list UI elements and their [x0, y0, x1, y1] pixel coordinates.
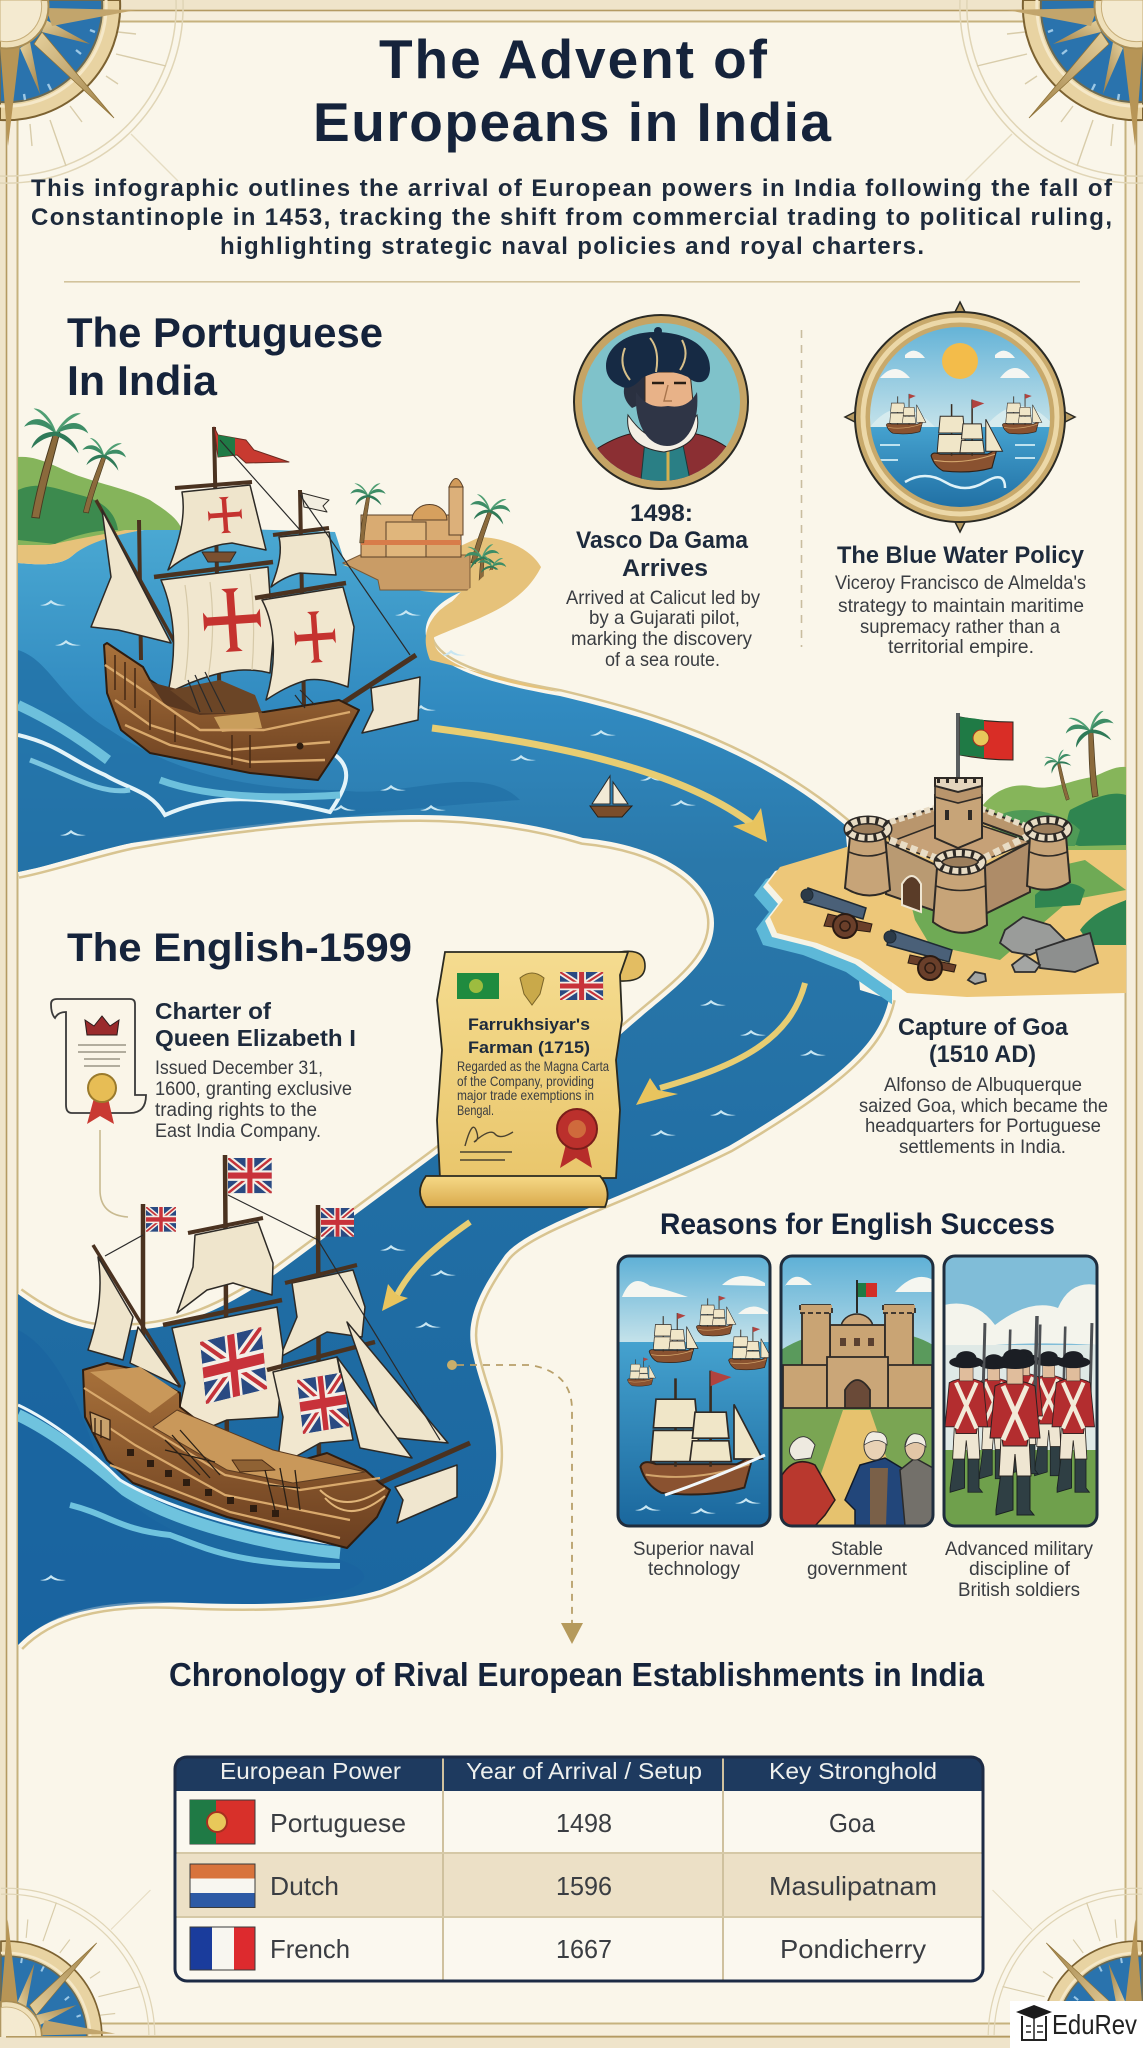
captions for reasons cards: discipline of — [969, 1559, 1071, 1580]
farman scroll: Farman (1715) — [468, 1038, 590, 1057]
portuguese ship — [91, 427, 420, 780]
english ship hull — [83, 1363, 390, 1548]
captions for reasons cards: Superior naval — [633, 1539, 754, 1560]
river map — [15, 408, 1128, 1645]
text: blue water policy — [835, 542, 1086, 658]
towers — [845, 836, 890, 896]
sea foam and waves — [18, 600, 826, 1581]
section heading: The English: The English-1599 — [67, 926, 412, 970]
table header: Key Stronghold — [769, 1758, 937, 1784]
text: vasco da gama: 1498: — [630, 500, 693, 527]
text: charter of queen elizabeth — [155, 998, 356, 1142]
island: left shore — [15, 408, 182, 564]
farman scroll: Bengal. — [457, 1102, 494, 1118]
row: portuguese — [190, 1800, 875, 1844]
card: superior naval technology — [618, 1256, 771, 1526]
chronology table — [175, 1757, 983, 1981]
connector curve: charter to ship — [100, 1130, 128, 1217]
text: vasco da gama: by a Gujarati pilot, — [589, 607, 740, 629]
medallion: blue water policy — [845, 302, 1075, 532]
icon: charter scroll — [51, 999, 146, 1124]
dashed divider — [800, 330, 802, 647]
text: vasco da gama: Arrives — [622, 555, 708, 582]
text: blue water policy: supremacy rather than a — [860, 616, 1060, 638]
row: french: Pondicherry — [780, 1934, 926, 1964]
captions for reasons cards: government — [807, 1559, 908, 1580]
text: capture of goa: headquarters for Portuguese — [865, 1115, 1101, 1137]
row: portuguese: 1498 — [556, 1808, 612, 1838]
row: french — [190, 1927, 926, 1970]
text: charter of queen elizabeth: trading rights to the — [155, 1100, 317, 1121]
wax seal — [557, 1109, 597, 1168]
text: blue water policy: strategy to maintain maritime — [838, 595, 1084, 617]
compass corner: top right — [960, 0, 1143, 183]
goa island and fort — [754, 709, 1128, 1009]
heading: reasons for english success: Reasons for English Success — [660, 1208, 1055, 1241]
text: capture of goa: Capture of Goa — [898, 1014, 1069, 1041]
text: blue water policy: territorial empire. — [888, 636, 1034, 658]
card: stable government — [781, 1256, 933, 1526]
text: charter of queen elizabeth: Queen Elizabeth I — [155, 1025, 356, 1051]
row: dutch: Dutch — [270, 1871, 339, 1901]
captions for reasons cards — [633, 1539, 1093, 1601]
captions for reasons cards: Advanced military — [945, 1539, 1093, 1560]
front walls — [886, 842, 938, 912]
dashed connector arrow — [447, 1360, 583, 1644]
route arrow three — [382, 1222, 470, 1311]
table header: European Power — [220, 1758, 401, 1784]
row: portuguese: Portuguese — [270, 1808, 406, 1838]
coastal town — [343, 478, 541, 640]
captions for reasons cards: British soldiers — [958, 1580, 1080, 1601]
compass corner: bottom right — [988, 1888, 1142, 2042]
card: advanced military discipline — [944, 1256, 1097, 1526]
row: portuguese: Goa — [829, 1808, 875, 1838]
english ship — [83, 1155, 470, 1548]
row: dutch: 1596 — [556, 1871, 612, 1901]
title — [313, 28, 831, 153]
section heading: The Portuguese: The Portuguese — [67, 309, 383, 356]
section heading: The Portuguese: In India — [67, 357, 218, 404]
intro text: This infographic outlines the arrival of European powers in India following the fall of — [31, 175, 1113, 202]
title: Europeans in India — [313, 91, 831, 153]
portrait: vasco da gama — [574, 315, 748, 490]
farman flags — [457, 972, 603, 1005]
table header: Year of Arrival / Setup — [466, 1758, 702, 1784]
back walls — [885, 808, 1030, 848]
compass corner: bottom left — [1, 1888, 155, 2042]
row: french: French — [270, 1934, 350, 1964]
cannons — [801, 888, 956, 980]
route arrow one — [432, 728, 767, 842]
text: vasco da gama: marking the discovery — [571, 628, 752, 650]
text: charter of queen elizabeth: Issued December 31, — [155, 1058, 323, 1079]
captions for reasons cards: Stable — [831, 1539, 883, 1560]
text: vasco da gama — [566, 500, 760, 671]
section heading: The Portuguese — [67, 309, 383, 404]
table header — [175, 1757, 983, 1791]
text: vasco da gama: of a sea route. — [605, 649, 720, 671]
rocks — [968, 917, 1098, 984]
fort flag — [958, 713, 1013, 778]
portuguese ship hull — [104, 643, 359, 780]
text: blue water policy: The Blue Water Policy — [837, 542, 1085, 569]
text: vasco da gama: Vasco Da Gama — [576, 527, 749, 554]
title: The Advent of — [379, 28, 768, 90]
captions for reasons cards: technology — [648, 1559, 740, 1580]
intro text: highlighting strategic naval policies and royal charters. — [220, 233, 924, 260]
farman scroll: of the Company, providing — [457, 1073, 594, 1089]
text: capture of goa: saized Goa, which became the — [859, 1095, 1108, 1117]
heading: chronology: Chronology of Rival European Establishments in India — [169, 1656, 985, 1693]
central keep — [935, 795, 982, 848]
text: blue water policy: Viceroy Francisco de Almelda's — [835, 572, 1086, 594]
logo: EduRev — [1010, 2001, 1143, 2048]
text: vasco da gama: Arrived at Calicut led by — [566, 587, 760, 609]
small sailboat — [590, 776, 632, 817]
intro text — [31, 175, 1113, 260]
text: capture of goa: (1510 AD) — [929, 1041, 1036, 1068]
row: dutch — [190, 1864, 937, 1908]
text: capture of goa — [859, 1014, 1108, 1158]
intro text: Constantinople in 1453, tracking the shift from commercial trading to political ruling, — [31, 204, 1112, 231]
text: charter of queen elizabeth: Charter of — [155, 998, 271, 1024]
sand coast strip — [426, 567, 560, 692]
text: charter of queen elizabeth: East India Company. — [155, 1121, 321, 1142]
route arrow two — [636, 983, 805, 1105]
farman scroll — [420, 951, 645, 1207]
text: charter of queen elizabeth: 1600, granting exclusive — [155, 1079, 352, 1100]
farman scroll: Farrukhsiyar's — [468, 1015, 590, 1034]
row: french: 1667 — [556, 1934, 612, 1964]
farman scroll: Regarded as the Magna Carta — [457, 1058, 609, 1074]
compass corner: top left — [0, 0, 183, 183]
text: capture of goa: settlements in India. — [899, 1136, 1066, 1158]
farman scroll: major trade exemptions in — [457, 1087, 594, 1103]
text: capture of goa: Alfonso de Albuquerque — [884, 1074, 1082, 1096]
row: dutch: Masulipatnam — [769, 1871, 937, 1901]
